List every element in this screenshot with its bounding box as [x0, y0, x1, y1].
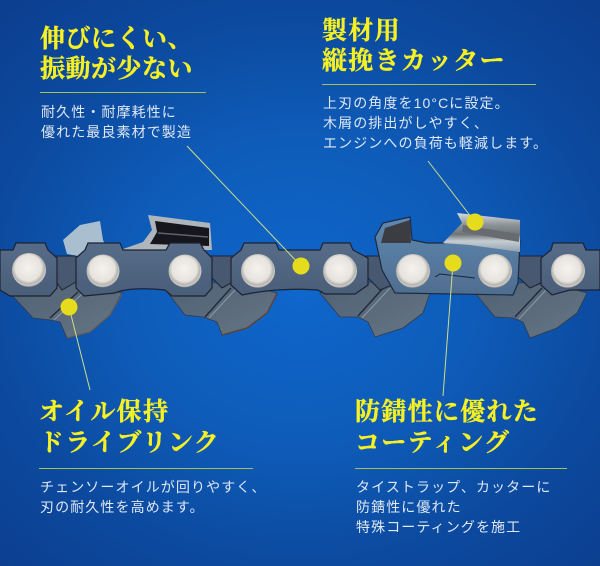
body text: タイストラップ、カッターに — [356, 479, 551, 495]
cutter 2 blade — [443, 213, 520, 252]
heading — [39, 398, 220, 457]
drive link 4 — [475, 280, 587, 338]
body text: 上刃の角度を10°Cに設定。 — [323, 95, 510, 111]
heading — [355, 398, 539, 457]
heading: 振動が少ない — [40, 56, 193, 82]
rivets — [12, 253, 585, 288]
side plate 2 — [76, 243, 212, 296]
body text — [41, 104, 192, 140]
callout: ripping cutter — [322, 17, 548, 151]
body text: 木屑の排出がしやすく、 — [323, 115, 489, 131]
body text — [323, 95, 548, 151]
heading: ドライブリンク — [39, 430, 220, 457]
drive link 1 — [10, 280, 122, 338]
body text: 防錆性に優れた — [356, 499, 462, 515]
heading: 伸びにくい、 — [40, 26, 193, 53]
body text: 耐久性・耐摩耗性に — [41, 104, 177, 120]
inner links — [55, 256, 543, 290]
drive link 2 — [168, 280, 277, 335]
side plate far left — [0, 243, 57, 296]
side plate 3 — [231, 243, 368, 295]
drive link 3 — [320, 280, 430, 337]
heading: 防錆性に優れた — [355, 399, 539, 426]
body text — [40, 479, 266, 515]
callout: stretch resistance — [40, 25, 206, 140]
leader lines — [69, 146, 475, 396]
heading — [40, 25, 193, 82]
body text — [356, 479, 551, 535]
body text: チェンソーオイルが回りやすく、 — [40, 479, 266, 495]
cutter 1 depth gauge — [63, 221, 106, 256]
body text: 特殊コーティングを施工 — [356, 519, 521, 535]
heading: 製材用 — [322, 18, 401, 45]
body text: 刃の耐久性を高めます。 — [40, 499, 205, 515]
side plate 5 — [541, 243, 600, 295]
cutter 2 depth gauge and plate — [375, 217, 520, 295]
callout: anti-rust coating — [355, 398, 567, 535]
marker dots — [60, 214, 484, 316]
heading: 縦挽きカッター — [322, 48, 506, 75]
body text: 優れた最良素材で製造 — [41, 124, 192, 140]
callout: oil drive link — [39, 398, 266, 515]
heading: オイル保持 — [39, 399, 169, 426]
body text: エンジンへの負荷も軽減します。 — [323, 135, 548, 151]
cutter 1 blade — [120, 215, 212, 250]
heading: コーティング — [355, 430, 510, 457]
heading — [322, 17, 506, 75]
